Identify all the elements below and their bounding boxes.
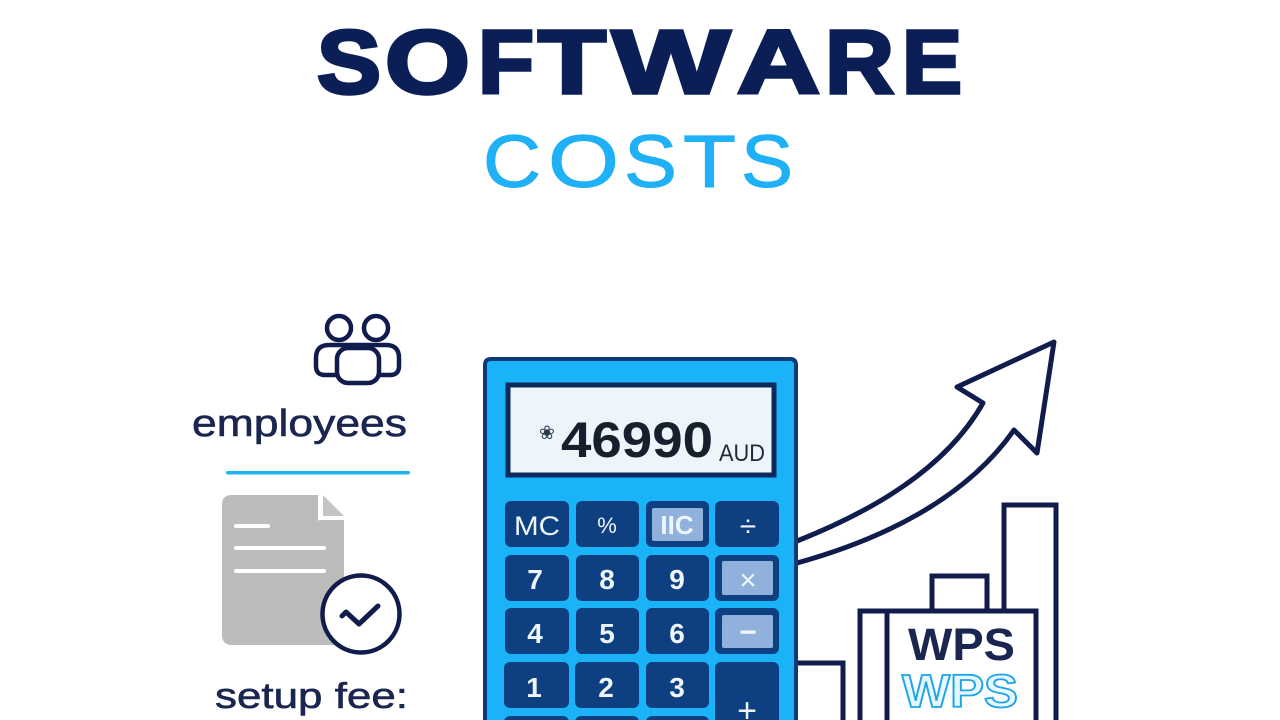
key labels: IIC [660, 510, 694, 540]
display currency: AUD [719, 440, 765, 467]
title: software: A [737, 13, 820, 113]
key labels [514, 510, 757, 720]
label: employees: employees [192, 403, 407, 445]
title: costs: S [624, 120, 677, 203]
title: software: W [612, 13, 730, 113]
key labels: × [739, 564, 757, 597]
small left bar [797, 663, 843, 720]
check mark [342, 606, 378, 624]
title: costs: S [741, 120, 793, 203]
WPS dark label: WPS [908, 619, 1015, 670]
divider line [226, 471, 410, 474]
key labels: 5 [599, 618, 615, 649]
title: software: R [825, 13, 894, 113]
label: setup fee: setup fee: [215, 675, 408, 716]
key labels: % [597, 513, 617, 538]
key labels: 8 [599, 564, 615, 595]
calculator body [485, 359, 796, 720]
document lines [236, 526, 324, 571]
title: software: F [478, 13, 534, 113]
key labels: 1 [526, 672, 542, 703]
title: costs [483, 120, 793, 203]
calculator [485, 359, 796, 720]
title: software: T [538, 13, 606, 113]
icon: employees group [316, 316, 399, 383]
mid bar [932, 576, 987, 611]
keypad [504, 501, 779, 720]
title: software: S [317, 13, 381, 113]
title: costs: C [483, 120, 541, 203]
title: costs: T [683, 120, 736, 203]
key labels: MC [514, 511, 560, 541]
display amount: 46990 [561, 412, 713, 468]
title: software: E [902, 13, 962, 113]
key labels: ÷ [740, 510, 756, 543]
key labels: 4 [527, 618, 543, 649]
WPS cyan outline label: WPS [902, 665, 1018, 717]
key labels: 2 [598, 672, 614, 703]
title: software: O [385, 13, 470, 113]
key labels: − [739, 616, 757, 649]
bar chart outlines [797, 505, 1056, 720]
key labels: 3 [669, 672, 685, 703]
check badge [322, 576, 400, 652]
key labels: 9 [669, 564, 685, 595]
display [508, 385, 774, 475]
arrow: rising trend [797, 342, 1054, 563]
document page [222, 495, 344, 645]
highlighted keys [652, 508, 773, 648]
title: software [317, 13, 962, 113]
WPS box [860, 611, 1036, 720]
box outline [860, 611, 1036, 720]
key labels: 6 [669, 618, 685, 649]
title: costs: O [548, 120, 619, 203]
icon: document with check [222, 495, 400, 652]
key labels: 7 [527, 564, 543, 595]
folded corner [323, 495, 344, 516]
display small glyph: ❀ [539, 423, 555, 444]
tall bar [1004, 505, 1056, 720]
